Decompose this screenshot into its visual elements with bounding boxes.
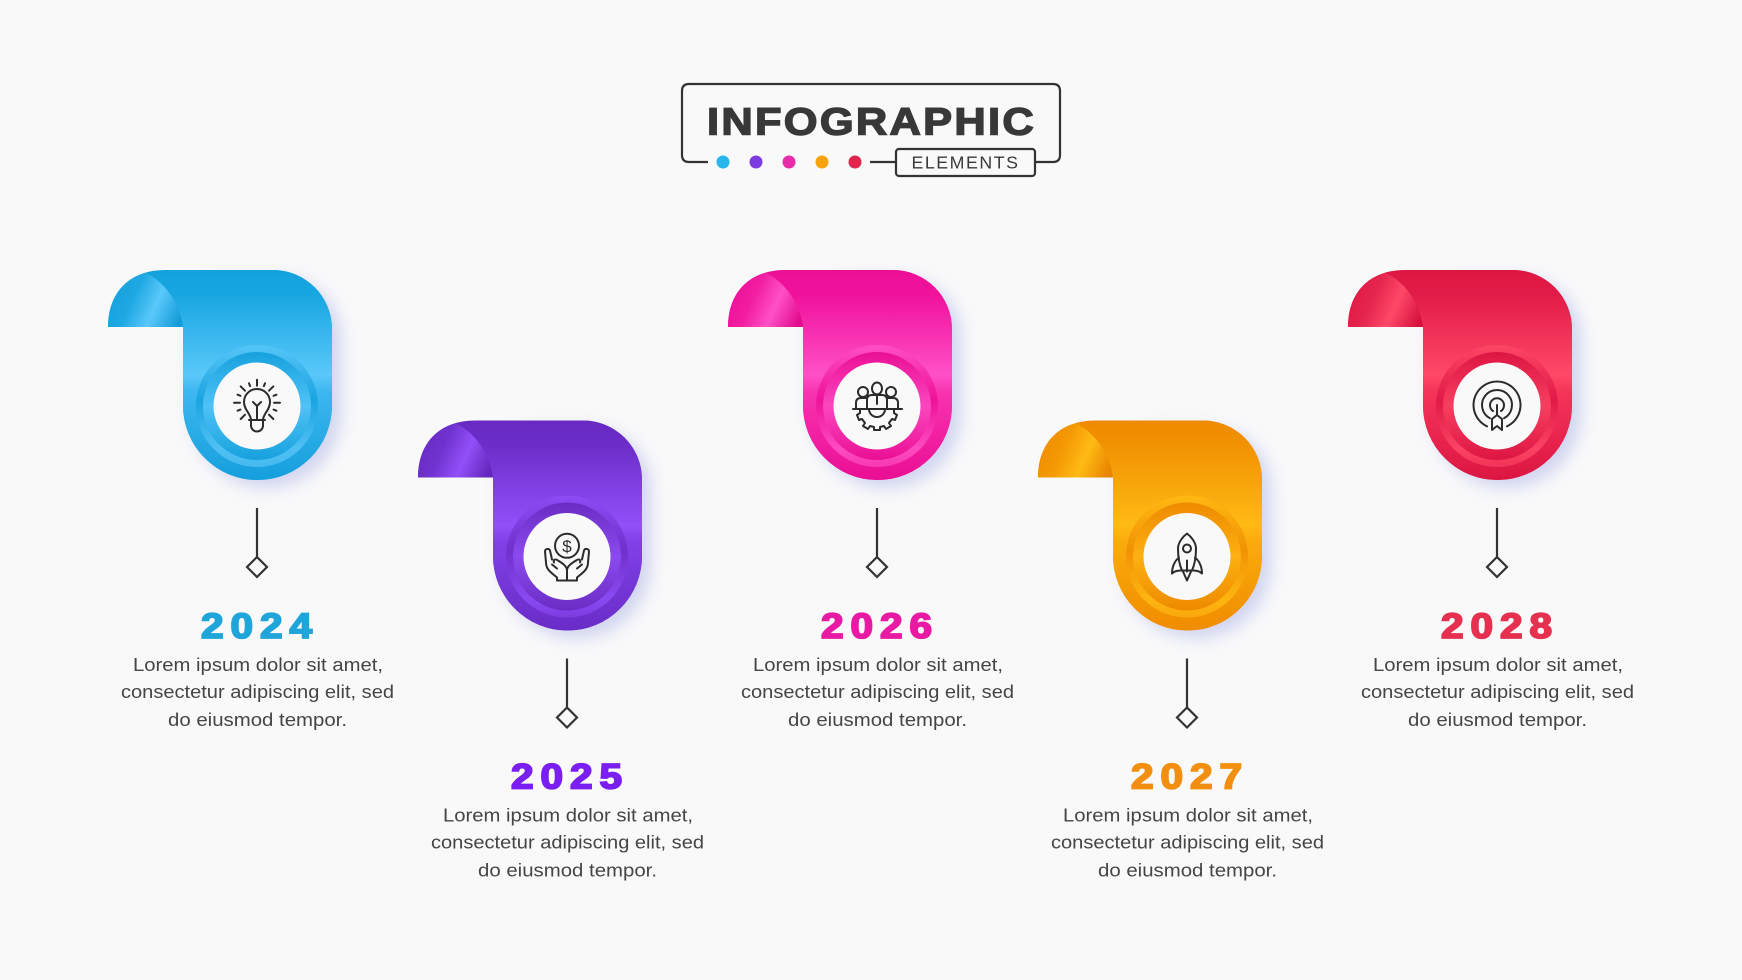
description bbox=[1361, 655, 1634, 730]
description: do eiusmod tempor. bbox=[1098, 860, 1277, 880]
title: INFOGRAPHIC: INFOGRAPHIC bbox=[707, 102, 1036, 144]
description: consectetur adipiscing elit, sed bbox=[1361, 682, 1634, 702]
description: do eiusmod tempor. bbox=[168, 710, 347, 730]
year: 2024: 2024 bbox=[201, 607, 319, 646]
icon: team and gear bbox=[853, 382, 902, 430]
ribbon: blue bbox=[108, 270, 332, 480]
icon: hands holding coin bbox=[545, 534, 589, 580]
year: 2028: 2028 bbox=[1441, 607, 1559, 646]
connector with diamond bbox=[867, 508, 887, 577]
year: 2025: 2025 bbox=[511, 758, 629, 796]
ribbon: pink bbox=[728, 270, 952, 480]
icon: light bulb bbox=[234, 380, 280, 432]
description: consectetur adipiscing elit, sed bbox=[121, 682, 394, 702]
description: do eiusmod tempor. bbox=[1408, 710, 1587, 730]
connector with diamond bbox=[1177, 658, 1197, 728]
step 2026 bbox=[728, 270, 1014, 730]
step 2024 bbox=[108, 270, 394, 730]
step 2027 bbox=[1038, 420, 1324, 880]
description: consectetur adipiscing elit, sed bbox=[1051, 832, 1324, 852]
year: 2026: 2026 bbox=[821, 607, 939, 646]
title badge bbox=[682, 84, 1060, 176]
badge outline bbox=[682, 84, 1060, 162]
description: consectetur adipiscing elit, sed bbox=[741, 682, 1014, 702]
subtitle box: ELEMENTS: ELEMENTS bbox=[912, 152, 1020, 172]
description bbox=[1051, 806, 1324, 880]
icon: rocket bbox=[1172, 534, 1202, 580]
description bbox=[121, 655, 394, 730]
step 2028 bbox=[1348, 270, 1634, 730]
description: Lorem ipsum dolor sit amet, bbox=[1373, 655, 1623, 675]
connector with diamond bbox=[557, 658, 577, 728]
description: Lorem ipsum dolor sit amet, bbox=[443, 806, 693, 826]
description: Lorem ipsum dolor sit amet, bbox=[133, 655, 383, 675]
icon: target with arrow bbox=[1474, 382, 1520, 430]
description: consectetur adipiscing elit, sed bbox=[431, 832, 704, 852]
step 2025 bbox=[418, 420, 704, 880]
connector with diamond bbox=[1487, 508, 1507, 577]
description bbox=[741, 655, 1014, 730]
year: 2027: 2027 bbox=[1131, 758, 1249, 796]
description: do eiusmod tempor. bbox=[788, 710, 967, 730]
subtitle box: ELEMENTS bbox=[896, 149, 1035, 176]
colour dots bbox=[716, 156, 862, 168]
ribbon: purple bbox=[418, 420, 642, 630]
connector with diamond bbox=[247, 508, 267, 577]
description: Lorem ipsum dolor sit amet, bbox=[1063, 806, 1313, 826]
description bbox=[431, 806, 704, 880]
ribbon: orange bbox=[1038, 420, 1262, 630]
icon: hands holding coin: $ bbox=[562, 537, 572, 556]
ribbon: red bbox=[1348, 270, 1572, 480]
description: do eiusmod tempor. bbox=[478, 860, 657, 880]
description: Lorem ipsum dolor sit amet, bbox=[753, 655, 1003, 675]
